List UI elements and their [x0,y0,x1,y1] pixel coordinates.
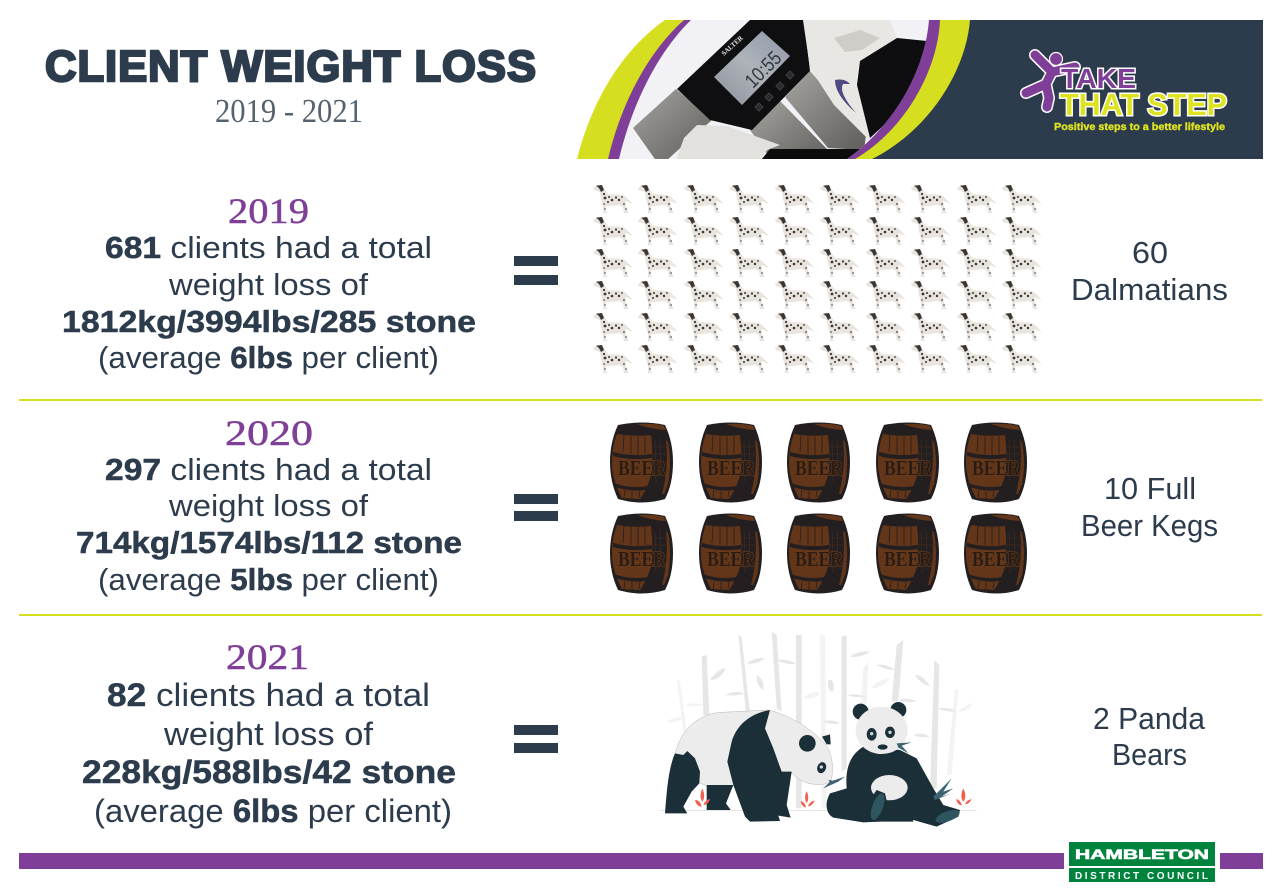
logo tagline: Positive steps to a better lifestyle [1054,121,1225,133]
label: 10 Full Beer Kegs: 10 Full [1104,471,1196,506]
logo figure [1026,52,1075,107]
pictogram: 10 beer kegs: BEER [972,456,1021,480]
panel: 2020 [76,413,1218,597]
year heading 2021: 2021 [226,637,309,677]
pictogram: 10 beer kegs: BEER [618,456,667,480]
pictogram: 10 beer kegs: BEER [707,547,756,571]
label: 2 Panda Bears: 2 Panda [1093,701,1206,736]
banner lime swoosh [577,20,970,159]
2021 description: 228kg/588lbs/42 stone [82,754,456,790]
label: 10 Full Beer Kegs [1081,471,1218,543]
2020 description: (average 5lbs per client) [98,563,439,597]
equals sign [514,725,558,753]
2021 description [82,677,456,829]
illustration: two panda bears with bamboo [660,632,977,827]
pictogram: 10 beer kegs: BEER [884,456,933,480]
logo: Hambleton District Council [1069,842,1215,882]
banner purple swoosh [608,20,940,159]
pictogram: 10 beer kegs: BEER [884,547,933,571]
equals sign [514,494,558,521]
banner photo: feet on weighing scales: SALTER [720,34,745,57]
year heading 2019: 2019 [228,191,309,231]
pictogram: 10 beer kegs: BEER [618,547,667,571]
year heading 2020: 2020 [225,413,313,453]
label: 60 Dalmatians: 60 [1132,235,1168,270]
subtitle: date range: 2019 - 2021 [215,93,363,130]
panel: 2019 [62,185,1228,375]
pictogram: 10 beer kegs: BEER [795,456,844,480]
label: 60 Dalmatians [1071,235,1228,307]
label: 2 Panda Bears [1093,701,1206,772]
2020 description [76,453,462,597]
label: 60 Dalmatians: Dalmatians [1071,272,1228,307]
pictogram: 10 beer kegs [610,422,1027,594]
2019 description: (average 6lbs per client) [98,341,439,375]
bamboo background [667,632,973,808]
2021 description: weight loss of [163,716,373,752]
label: 2 Panda Bears: Bears [1112,737,1187,772]
2020 description: weight loss of [168,489,369,523]
2020 description: 714kg/1574lbs/112 stone [76,526,462,560]
logo wordmark THAT STEP: THAT STEP [1060,87,1227,122]
2019 description: 1812kg/3994lbs/285 stone [62,305,476,339]
equals sign [514,256,558,285]
2019 description: weight loss of [168,268,369,302]
banner photo: feet on weighing scales: 10:55 [741,47,786,93]
pictogram: 10 beer kegs: BEER [972,547,1021,571]
2021 description: 82 clients had a total [107,677,430,713]
header banner [577,20,1263,165]
logo: Hambleton District Council: HAMBLETON [1075,846,1209,862]
right panda: sitting [823,702,961,827]
title: CLIENT WEIGHT LOSS [45,42,537,91]
pictogram: 10 beer kegs: BEER [795,547,844,571]
logo: Take That Step [1026,52,1227,133]
label: 10 Full Beer Kegs: Beer Kegs [1081,508,1218,543]
pictogram: 60 dalmatians [593,185,1042,373]
logo: Hambleton District Council: DISTRICT COUNCIL [1075,871,1208,882]
2020 description: 297 clients had a total [105,453,432,487]
left panda: standing [665,710,833,822]
logo wordmark TAKE: TAKE [1061,63,1136,94]
2021 description: (average 6lbs per client) [94,793,452,829]
panel: 2021 [82,632,1206,829]
2019 description [62,231,476,375]
red plants [695,788,972,808]
pictogram: 10 beer kegs: BEER [707,456,756,480]
footer bar [19,853,1263,869]
2019 description: 681 clients had a total [105,231,432,265]
banner photo: feet on weighing scales [610,20,935,165]
